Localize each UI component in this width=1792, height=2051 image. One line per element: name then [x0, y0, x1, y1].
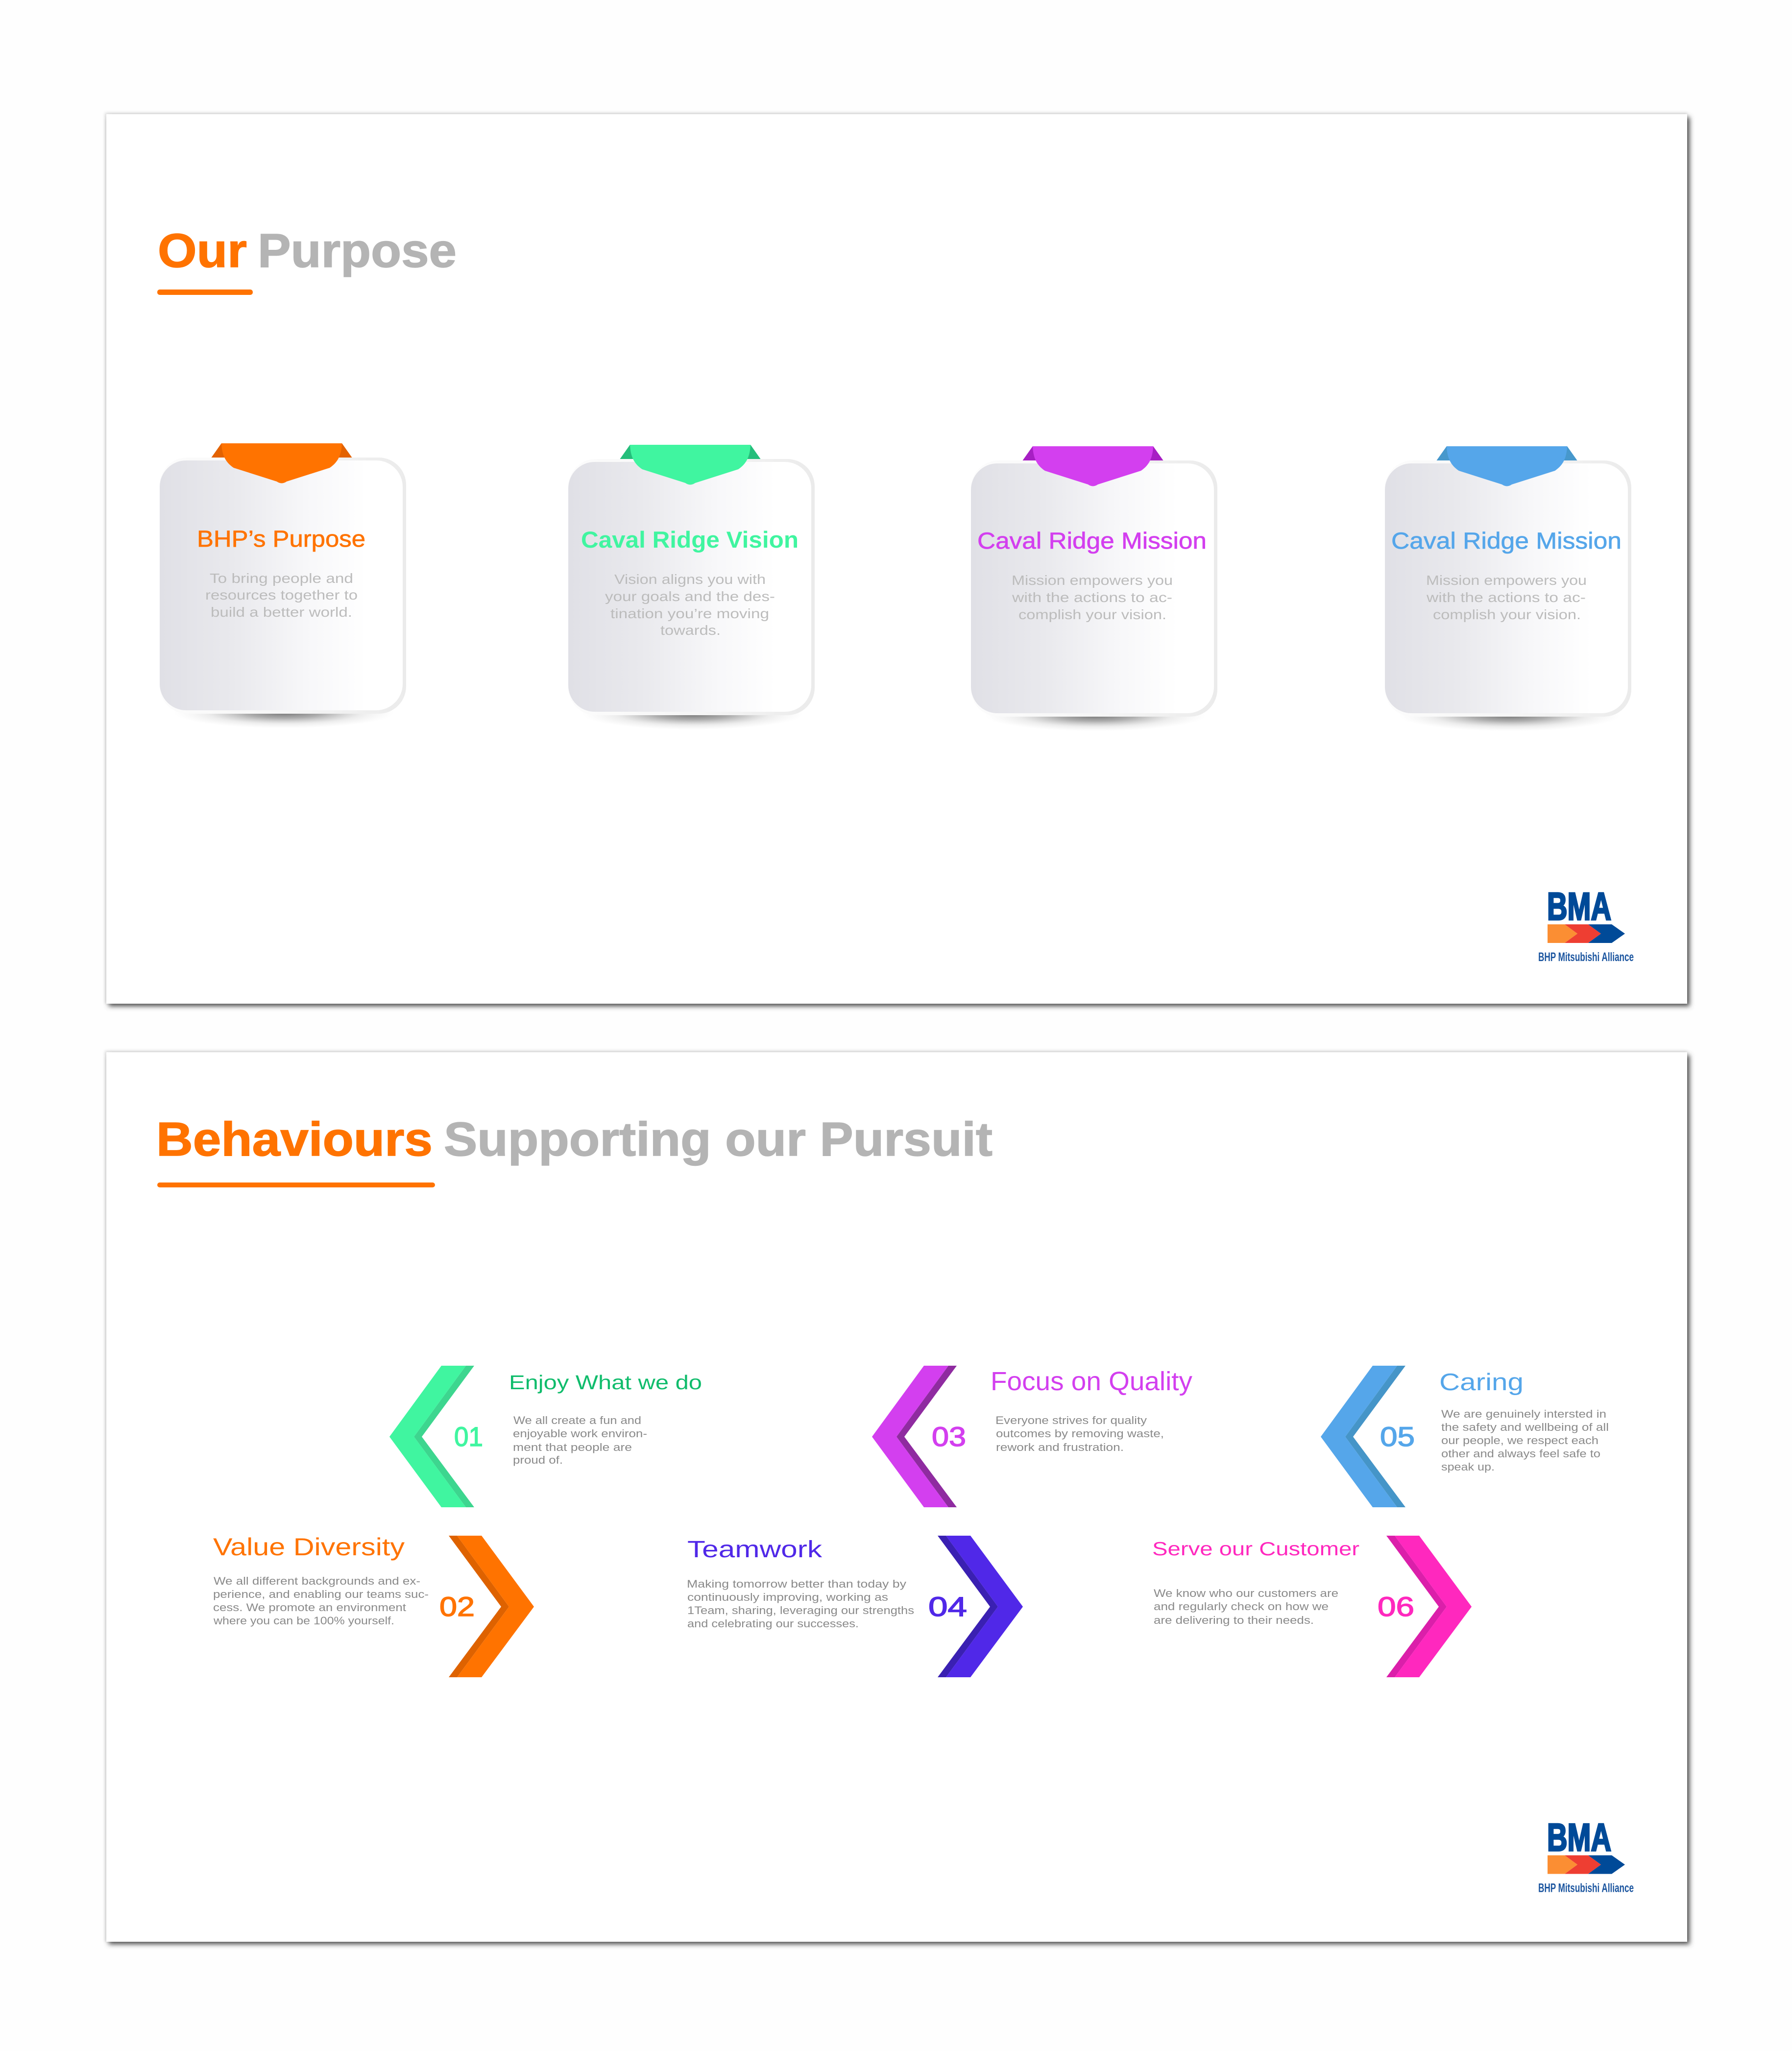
- heading: Behaviours Supporting our Pursuit: [156, 1112, 993, 1166]
- text 02: [213, 1575, 429, 1627]
- title 01: Enjoy What we do: [509, 1371, 702, 1394]
- text 05: speak up.: [1441, 1461, 1495, 1473]
- panel: behaviours slide: [105, 1051, 1690, 1944]
- number 01: 01: [454, 1421, 483, 1452]
- title 05: Caring: [1439, 1369, 1524, 1396]
- text 05: We are genuinely intersted in: [1441, 1408, 1606, 1420]
- ribbon: magenta: [1023, 446, 1163, 486]
- heading: Our Purpose: Purpose: [258, 224, 457, 277]
- item 05: Caring: [1321, 1366, 1609, 1507]
- card text: [1426, 573, 1587, 622]
- text 02: perience, and enabling our teams suc-: [213, 1588, 429, 1600]
- text 03: rework and frustration.: [996, 1441, 1124, 1453]
- text 04: Making tomorrow better than today by: [687, 1578, 906, 1590]
- card text: [605, 572, 775, 638]
- ribbon: green: [620, 445, 760, 485]
- card text: with the actions to ac-: [1012, 590, 1172, 605]
- card: Caval Ridge Mission (blue): [1385, 446, 1631, 731]
- heading: Our Purpose: Our: [158, 224, 247, 277]
- number 03: 03: [932, 1421, 966, 1452]
- chevron 03: [872, 1366, 957, 1507]
- card text: Mission empowers you: [1012, 573, 1173, 588]
- text 05: our people, we respect each: [1441, 1434, 1598, 1447]
- ribbon: blue: [1436, 446, 1577, 486]
- logo: BMA: [1538, 1815, 1634, 1895]
- slide background 2: [105, 1051, 1690, 1944]
- number 02: 02: [439, 1591, 475, 1622]
- card title: BHP’s Purpose: [197, 526, 365, 552]
- text 04: and celebrating our successes.: [687, 1617, 859, 1630]
- heading: Behaviours Supporting our Pursuit: Supporting our Pursuit: [444, 1112, 993, 1166]
- card: Caval Ridge Vision: [568, 445, 815, 730]
- text 02: where you can be 100% yourself.: [213, 1615, 394, 1627]
- item 04: Teamwork: [687, 1536, 1023, 1677]
- text 04: 1Team, sharing, leveraging our strengths: [687, 1604, 914, 1617]
- card text: towards.: [660, 623, 721, 638]
- card title: Caval Ridge Vision: [581, 527, 799, 553]
- logo: BMA: BMA: [1547, 885, 1611, 928]
- number 04: 04: [928, 1591, 967, 1622]
- card text: To bring people and: [210, 571, 353, 586]
- card text: [1012, 573, 1173, 622]
- text 03: outcomes by removing waste,: [996, 1427, 1164, 1440]
- text 05: other and always feel safe to: [1441, 1448, 1600, 1460]
- card text: tination you’re moving: [610, 606, 769, 621]
- card text: [205, 571, 358, 620]
- text 03: Everyone strives for quality: [995, 1414, 1147, 1426]
- item 02: Value Diversity: [213, 1533, 534, 1677]
- text 01: proud of.: [513, 1454, 563, 1466]
- text 06: are delivering to their needs.: [1154, 1614, 1314, 1626]
- panel: our purpose slide: [105, 113, 1690, 1006]
- card title: Caval Ridge Mission: [977, 528, 1207, 554]
- item 01: Enjoy What we do: [389, 1366, 702, 1507]
- title 02: Value Diversity: [213, 1533, 405, 1561]
- heading underline: [157, 290, 253, 295]
- number 05: 05: [1380, 1421, 1415, 1452]
- heading: Behaviours Supporting our Pursuit: Behaviours: [156, 1112, 433, 1166]
- text 01: We all create a fun and: [513, 1414, 641, 1426]
- text 06: and regularly check on how we: [1154, 1600, 1329, 1613]
- text 04: [687, 1578, 914, 1630]
- card text: complish your vision.: [1018, 607, 1166, 622]
- card: Caval Ridge Mission (magenta): [971, 446, 1217, 731]
- slide background 1: [105, 113, 1690, 1006]
- logo: BMA: BMA: [1547, 1815, 1611, 1859]
- text 04: continuously improving, working as: [687, 1591, 888, 1603]
- title 04: Teamwork: [687, 1537, 823, 1563]
- chevron 06: [1386, 1536, 1472, 1677]
- text 05: the safety and wellbeing of all: [1441, 1421, 1609, 1433]
- chevron 02: [449, 1536, 534, 1677]
- card text: with the actions to ac-: [1426, 590, 1586, 605]
- item 06: Serve our Customer: [1152, 1536, 1472, 1677]
- card text: complish your vision.: [1433, 607, 1581, 622]
- logo: BMA: BHP Mitsubishi Alliance: [1538, 1881, 1634, 1895]
- text 02: We all different backgrounds and ex-: [214, 1575, 420, 1587]
- heading underline: [157, 1182, 435, 1187]
- title 03: Focus on Quality: [991, 1367, 1192, 1396]
- card title: Caval Ridge Mission: [1391, 528, 1622, 554]
- card text: Vision aligns you with: [614, 572, 766, 587]
- text 01: enjoyable work environ-: [513, 1427, 647, 1440]
- heading: Our Purpose: [158, 224, 457, 277]
- number 06: 06: [1378, 1591, 1414, 1622]
- card text: resources together to: [205, 587, 358, 603]
- chevron 01: [389, 1366, 474, 1507]
- text 06: [1154, 1587, 1338, 1626]
- title 06: Serve our Customer: [1152, 1539, 1359, 1560]
- text 01: [513, 1414, 647, 1466]
- text 02: cess. We promote an environment: [213, 1601, 406, 1614]
- text 03: [995, 1414, 1164, 1453]
- text 01: ment that people are: [513, 1441, 632, 1453]
- logo: BMA: [1538, 885, 1634, 964]
- text 06: We know who our customers are: [1154, 1587, 1338, 1599]
- ribbon: orange: [212, 443, 352, 483]
- card text: your goals and the des-: [605, 589, 775, 604]
- chevron 05: [1321, 1366, 1405, 1507]
- card text: Mission empowers you: [1426, 573, 1587, 588]
- text 05: [1441, 1408, 1609, 1473]
- logo: BMA: BHP Mitsubishi Alliance: [1538, 950, 1634, 964]
- card: BHP's Purpose: [160, 443, 406, 728]
- card text: build a better world.: [211, 604, 352, 620]
- chevron 04: [938, 1536, 1023, 1677]
- item 03: Focus on Quality: [872, 1366, 1192, 1507]
